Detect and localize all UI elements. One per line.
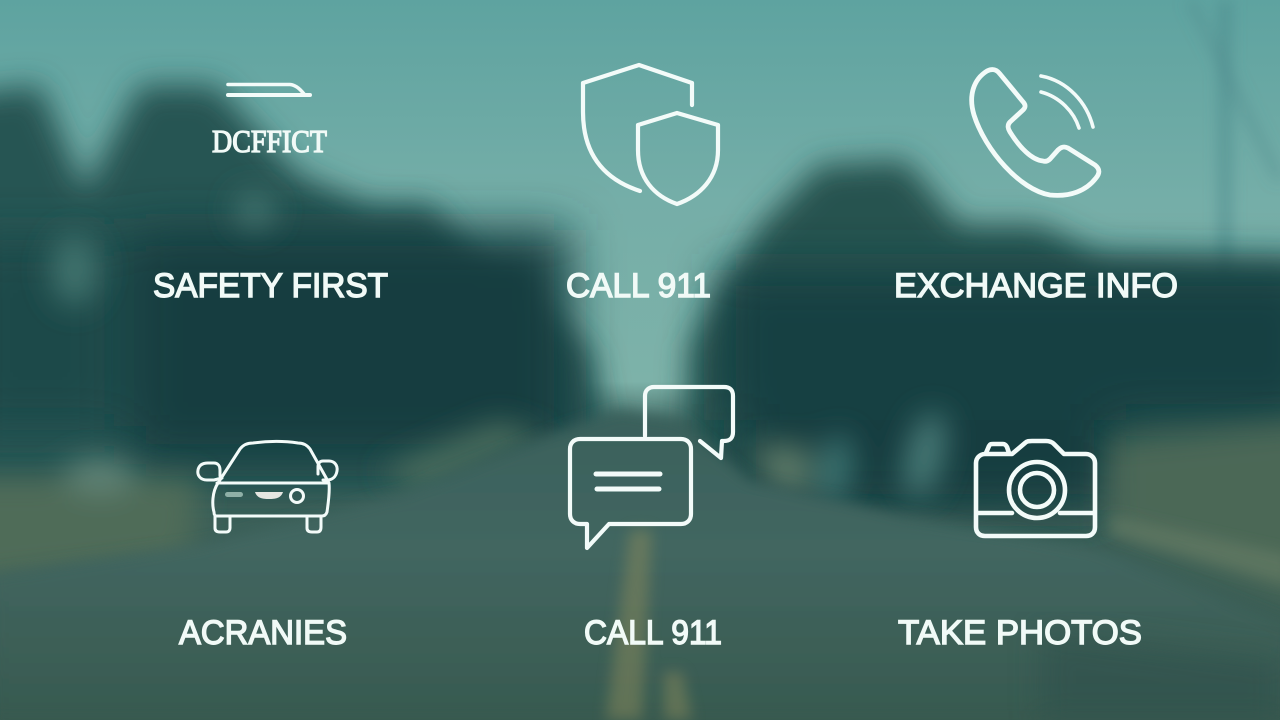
icon: garbled wordmark (212, 84, 327, 159)
icon: car (198, 442, 337, 532)
heading: acranies: ACRANIES (179, 614, 347, 652)
icon: garbled wordmark: DCFFICT (212, 123, 327, 159)
panel: exchange info (894, 70, 1178, 305)
heading: call 911: CALL 911 (584, 614, 722, 652)
panel: take photos (898, 441, 1142, 652)
icon: camera (976, 441, 1095, 536)
heading: exchange info: EXCHANGE INFO (894, 267, 1178, 305)
heading: call 911: CALL 911 (566, 267, 711, 305)
icon: chat bubbles (570, 387, 733, 548)
panel: acranies (179, 442, 347, 652)
icon: phone (972, 70, 1099, 195)
icon: shields (583, 65, 718, 204)
panel: call 911 top (566, 65, 718, 305)
heading: safety first: SAFETY FIRST (153, 267, 388, 305)
panel: call 911 bottom (570, 387, 733, 652)
panel: safety first (153, 84, 388, 305)
heading: take photos: TAKE PHOTOS (898, 614, 1142, 652)
